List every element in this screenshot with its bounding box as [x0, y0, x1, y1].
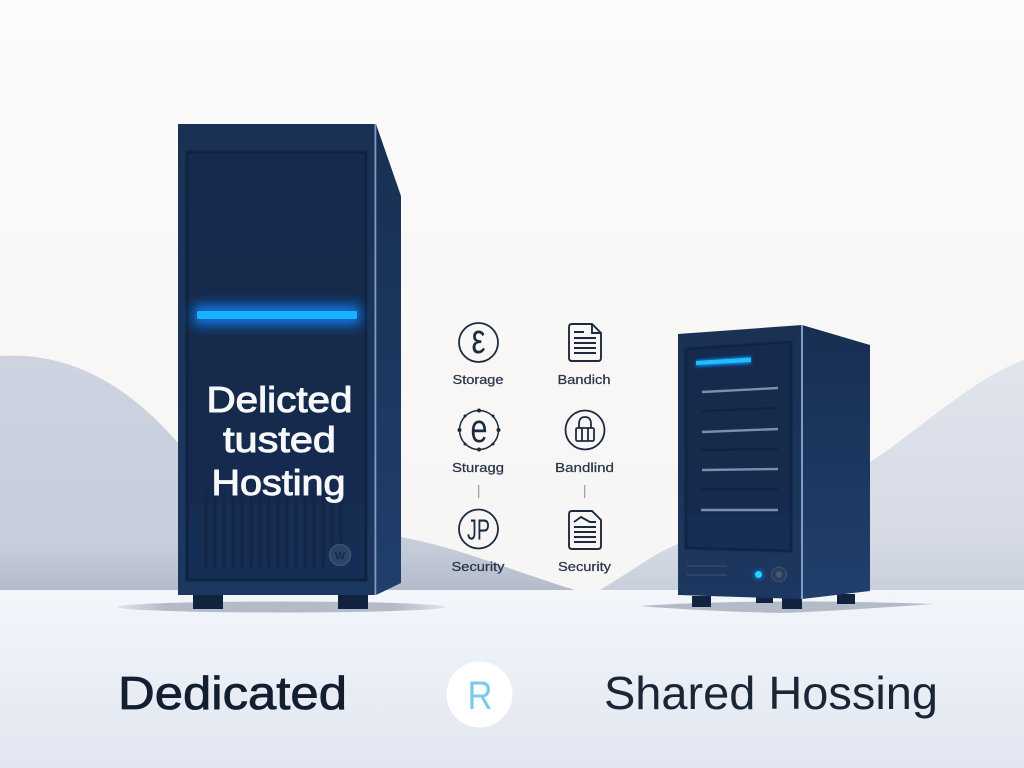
small server: shared	[640, 325, 933, 613]
right hill	[600, 360, 1024, 590]
connector left	[478, 485, 479, 498]
floor	[0, 590, 1024, 768]
logo badge	[330, 544, 350, 566]
left hill	[0, 356, 178, 590]
label: bandwidth: Bandich	[558, 372, 610, 387]
server feet	[692, 594, 855, 609]
icon: padlock	[566, 410, 604, 450]
centre hill	[376, 532, 575, 590]
server side	[376, 124, 401, 595]
icon: storage coin	[459, 315, 498, 362]
connector right	[584, 485, 585, 498]
power button	[772, 567, 786, 582]
label: security right: Security	[558, 559, 612, 574]
icon: JP coin	[459, 510, 498, 548]
server side	[802, 325, 870, 599]
large server: dedicated	[117, 124, 445, 612]
server shadow	[117, 602, 445, 612]
glow bar	[194, 305, 360, 325]
bottom label: dedicated: Dedicated	[118, 667, 347, 719]
server front	[178, 124, 376, 595]
server door panel	[686, 342, 791, 551]
vent grille	[206, 492, 341, 568]
server shadow	[640, 601, 933, 613]
power led	[752, 568, 764, 580]
versus badge	[446, 662, 512, 728]
server feet	[193, 594, 368, 609]
label: storage: Storage	[452, 372, 504, 387]
server title: Delicted	[206, 379, 352, 420]
versus badge: R	[468, 674, 492, 718]
bottom label: shared hosting: Shared Hossing	[604, 667, 938, 719]
icon: JP coin: JP	[467, 514, 490, 546]
server title: tusted	[223, 419, 336, 460]
label: storage variant: Sturagg	[452, 460, 504, 475]
label: bandwidth variant: Bandlind	[555, 460, 614, 475]
icon: document with chart	[569, 511, 601, 549]
icon: dotted e	[458, 407, 500, 452]
icon: document	[569, 324, 601, 361]
logo badge: W	[335, 550, 346, 562]
drive slots	[701, 388, 778, 510]
icon: dotted e: e	[470, 407, 488, 451]
server door panel	[187, 152, 366, 580]
feature icons	[452, 315, 614, 574]
label: security left: Security	[452, 559, 505, 574]
server title: Hosting	[212, 462, 346, 503]
server title	[206, 379, 352, 503]
icon: storage coin: ε	[472, 315, 486, 362]
server front	[678, 325, 802, 599]
glow bar	[696, 356, 751, 367]
front vents	[687, 566, 727, 575]
